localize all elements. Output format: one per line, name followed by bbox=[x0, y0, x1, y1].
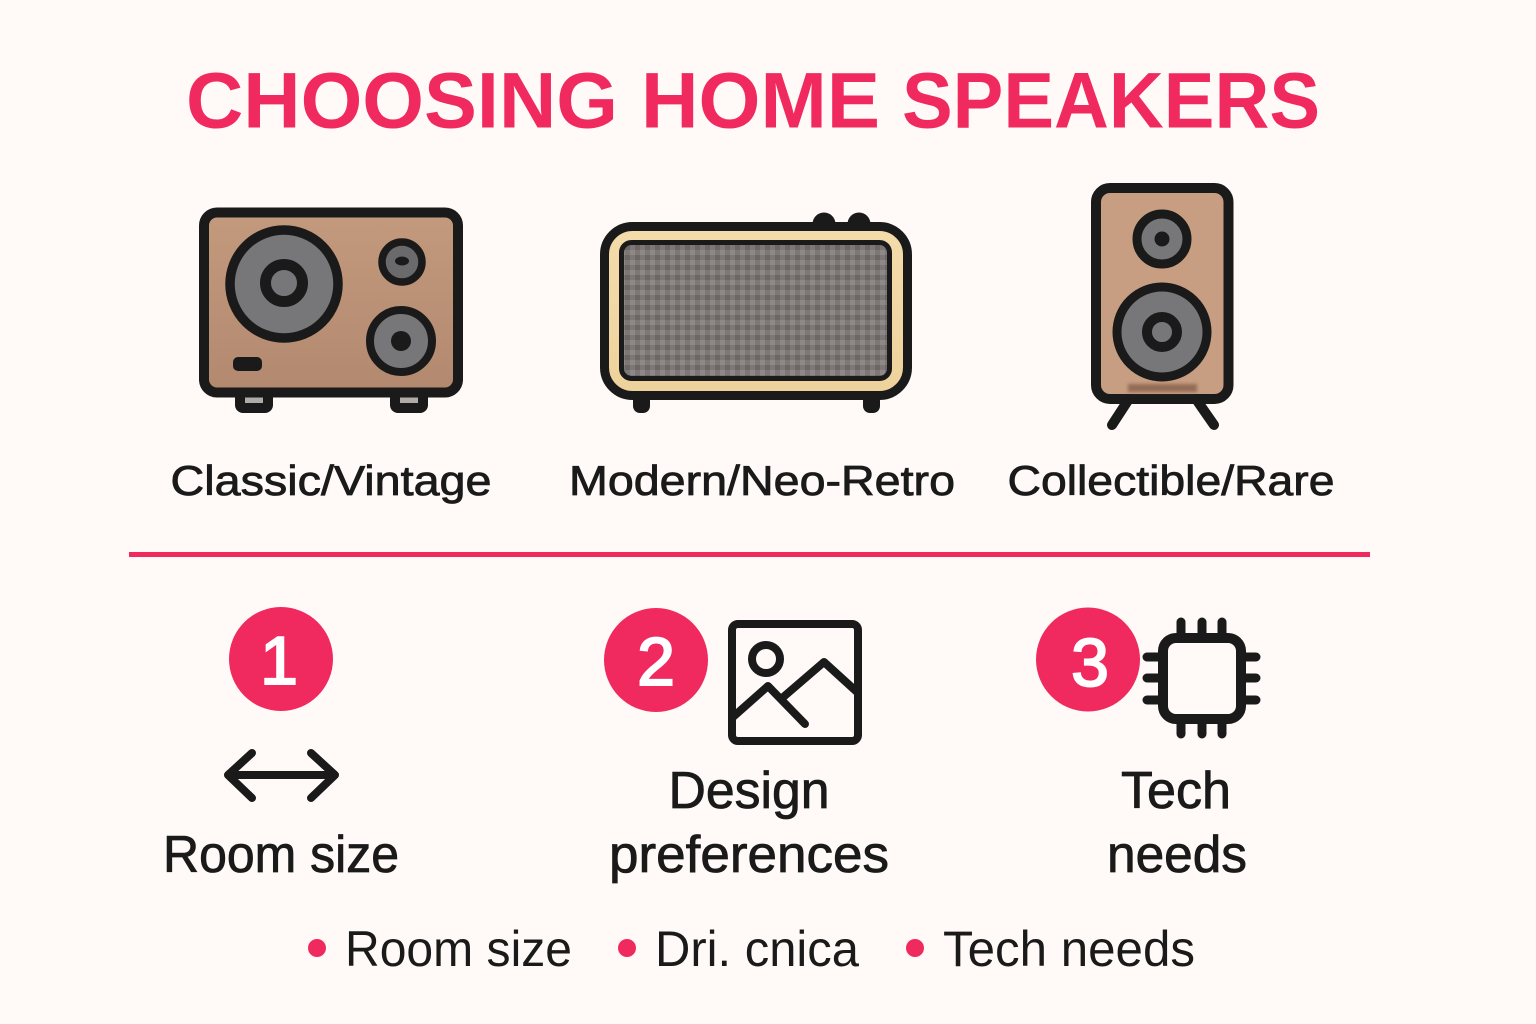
bullet: dri. cnica: Dri. cnica bbox=[655, 921, 859, 977]
icon: microchip bbox=[1147, 622, 1256, 734]
icon: collectible rare speaker bbox=[1096, 188, 1228, 425]
icon: double arrow for room size bbox=[228, 753, 335, 798]
text: tech needs bbox=[1107, 762, 1247, 884]
title bbox=[186, 56, 1320, 144]
text: design preferences: Design bbox=[668, 762, 830, 820]
number badge 3: 3 bbox=[1071, 625, 1109, 701]
text: design preferences: preferences bbox=[609, 826, 889, 884]
label: modern neo-retro: Modern/Neo-Retro bbox=[569, 457, 955, 504]
text: tech needs: Tech bbox=[1121, 762, 1231, 820]
icon: picture frame bbox=[732, 624, 858, 741]
title: HOME bbox=[641, 56, 880, 144]
title: CHOOSING bbox=[186, 56, 618, 144]
text: design preferences bbox=[609, 762, 889, 884]
number badge 1 bbox=[229, 607, 333, 711]
icon: classic vintage speaker bbox=[204, 212, 458, 413]
label: classic vintage: Classic/Vintage bbox=[170, 457, 492, 504]
number badge 3 bbox=[1036, 608, 1140, 712]
text: tech needs: needs bbox=[1107, 826, 1247, 884]
icon: modern neo-retro speaker bbox=[604, 212, 908, 413]
number badge 1: 1 bbox=[260, 623, 298, 699]
title: SPEAKERS bbox=[902, 56, 1320, 144]
number badge 2 bbox=[604, 608, 708, 712]
bullet: room size: Room size bbox=[345, 921, 572, 977]
label: collectible rare: Collectible/Rare bbox=[1008, 457, 1334, 504]
text: room size: Room size bbox=[163, 826, 399, 884]
number badge 2: 2 bbox=[637, 624, 675, 700]
bullet: tech needs: Tech needs bbox=[943, 921, 1195, 977]
